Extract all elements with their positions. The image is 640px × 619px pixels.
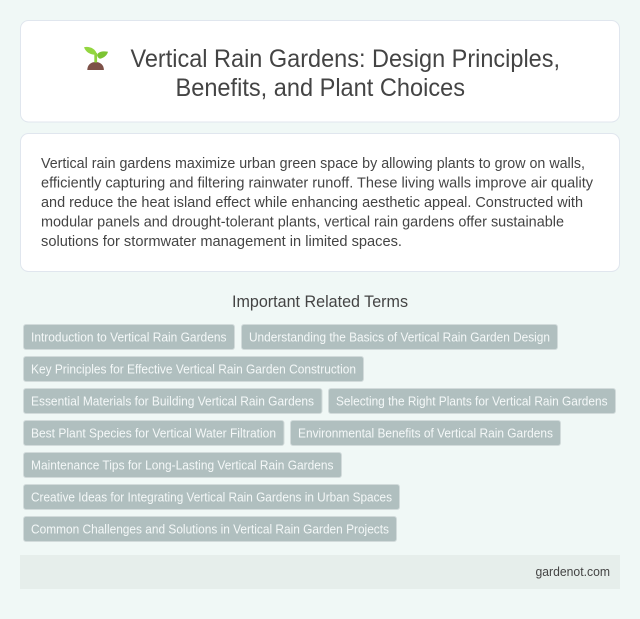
- tag: introduction: [24, 324, 234, 350]
- text block: intro paragraph: and reduce the heat island effect while enhancing aesthetic appeal. Constructed with: [41, 194, 583, 211]
- heading: important related terms: Important Related Terms: [232, 292, 408, 311]
- icon: seedling: [84, 47, 108, 70]
- tag: common challenges: [24, 516, 396, 542]
- tag: best plant species: [24, 420, 284, 446]
- tag: maintenance tips: Maintenance Tips for Long-Lasting Vertical Rain Gardens: [31, 458, 334, 472]
- tag: creative ideas: Creative Ideas for Integrating Vertical Rain Gardens in Urban Spaces: [31, 490, 392, 504]
- text block: intro paragraph: efficiently capturing and filtering rainwater runoff. These living walls improve air quality: [41, 174, 593, 192]
- tag: introduction: Introduction to Vertical Rain Gardens: [31, 330, 227, 344]
- text block: intro paragraph: Vertical rain gardens maximize urban green space by allowing plants to grow on walls,: [41, 155, 585, 172]
- tag: common challenges: Common Challenges and Solutions in Vertical Rain Garden Projects: [31, 522, 389, 536]
- panel: title card: [20, 20, 620, 122]
- footer: gardenot.com: [536, 564, 610, 579]
- tag: understanding the basics: Understanding the Basics of Vertical Rain Garden Design: [249, 330, 550, 344]
- heading: title: Vertical Rain Gardens: Design Principles,: [130, 45, 560, 73]
- text block: intro paragraph: solutions for stormwater management in limited spaces.: [41, 233, 402, 250]
- tag: maintenance tips: [24, 452, 342, 478]
- tag: essential materials: Essential Materials for Building Vertical Rain Gardens: [31, 394, 314, 408]
- tag: best plant species: Best Plant Species for Vertical Water Filtration: [31, 426, 276, 440]
- heading: title: Benefits, and Plant Choices: [176, 74, 465, 102]
- tag list: related terms: [24, 324, 616, 542]
- tag: environmental benefits: [290, 420, 560, 446]
- heading: title: [130, 45, 560, 102]
- panel: intro paragraph card: [20, 134, 620, 272]
- tag: selecting plants: [328, 388, 616, 414]
- text block: intro paragraph: modular panels and drought-tolerant plants, vertical rain gardens offer sustainable: [41, 214, 564, 230]
- footer: [20, 555, 620, 589]
- tag: essential materials: [24, 388, 322, 414]
- tag: understanding the basics: [242, 324, 558, 350]
- tag: key principles: Key Principles for Effective Vertical Rain Garden Construction: [31, 362, 356, 376]
- tag: key principles: [24, 356, 364, 382]
- text block: intro paragraph: [41, 155, 593, 250]
- tag: selecting plants: Selecting the Right Plants for Vertical Rain Gardens: [336, 394, 608, 408]
- tag: creative ideas: [24, 484, 400, 510]
- tag: environmental benefits: Environmental Benefits of Vertical Rain Gardens: [298, 426, 553, 440]
